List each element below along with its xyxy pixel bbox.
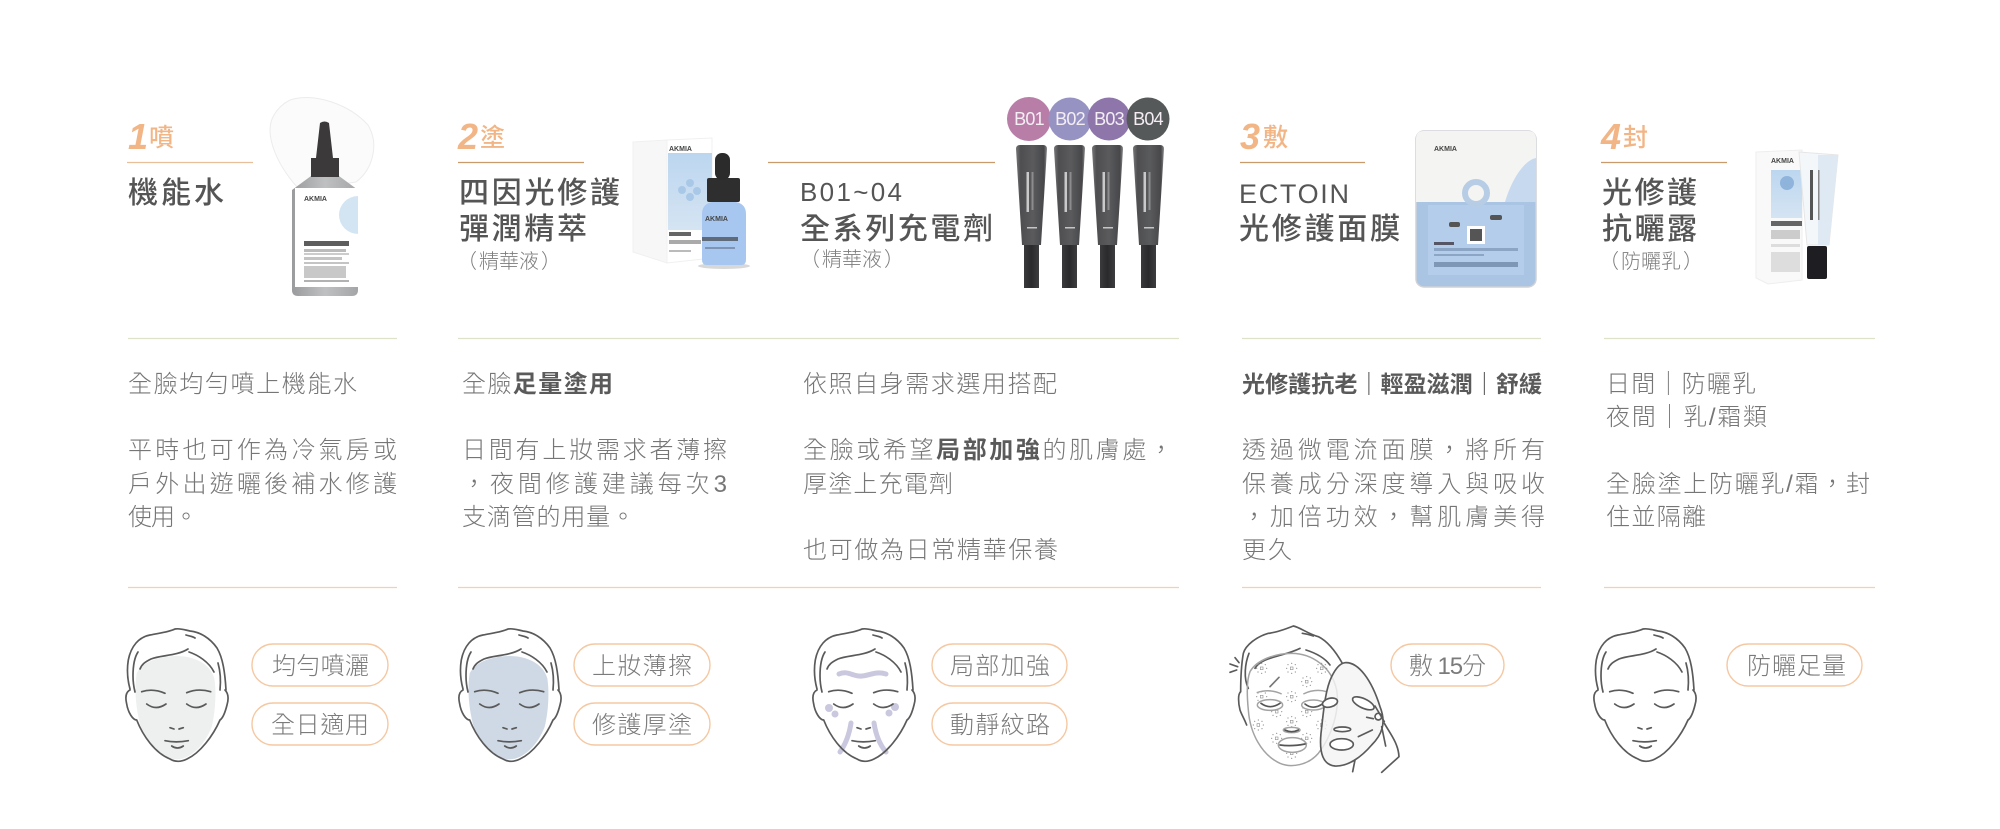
B01~04 heading: 全系列充電劑 (800, 213, 993, 246)
pills: serum (574, 644, 710, 745)
step 4 heading: 光修護 (1602, 177, 1697, 210)
pills: booster: 局部加強 (950, 653, 1050, 680)
icon: plain face (1594, 629, 1696, 761)
step 4 heading (1599, 116, 1727, 273)
B01~04 heading: （精華液） (800, 248, 904, 271)
product: serum box and bottle (633, 138, 750, 269)
text block: step 2 booster (803, 371, 1173, 564)
step 4 heading: 4 (1600, 116, 1621, 157)
text block: step 2 booster: 依照自身需求選用搭配 (803, 371, 1057, 398)
dividers (128, 338, 1875, 588)
colour badges B01-B04: B01 (1014, 109, 1045, 129)
colour badges B01-B04: B04 (1133, 109, 1164, 129)
text block: step 3 (1242, 371, 1545, 564)
step 3 heading: 敷 (1263, 124, 1288, 152)
step 2 heading: 四因光修護 (459, 177, 620, 210)
step 3 heading: 光修護面膜 (1239, 213, 1400, 246)
step 4 heading: 抗曬露 (1602, 213, 1697, 246)
text block: step 2 serum: 全臉足量塗用 (462, 370, 613, 398)
text block: step 2 booster: 也可做為日常精華保養 (803, 537, 1058, 564)
step 2 heading: 2 (457, 116, 478, 157)
icon: face with blue full coverage (459, 629, 561, 761)
pills: spray: 均勻噴灑 (272, 653, 369, 680)
text block: step 2 serum (462, 370, 727, 531)
colour badges B01-B04: B03 (1094, 109, 1125, 129)
text block: step 2 serum: ，夜間修護建議每次3 (462, 471, 727, 498)
step 2 heading: 彈潤精萃 (459, 213, 587, 246)
step 1 heading: 噴 (149, 124, 174, 152)
pill: sunscreen: 防曬足量 (1747, 653, 1846, 680)
text block: step 3: 光修護抗老｜輕盈滋潤｜舒緩 (1242, 371, 1542, 397)
product: spray bottle: AKMIA (304, 196, 327, 203)
product: serum box and bottle: AKMIA (669, 146, 692, 153)
text block: step 3: 保養成分深度導入與吸收 (1242, 471, 1545, 498)
product: mask sachet (1416, 131, 1536, 287)
text block: step 4: 日間｜防曬乳 (1606, 371, 1756, 398)
product: mask sachet: AKMIA (1434, 146, 1457, 153)
pills: booster (932, 644, 1067, 745)
text block: step 1: 戶外出遊曬後補水修護 (128, 471, 397, 498)
product: four booster tubes (1016, 145, 1164, 288)
step 4 heading: 封 (1623, 124, 1648, 152)
pill: mask time (1391, 644, 1504, 686)
text block: step 1: 使用。 (128, 504, 198, 531)
step 3 heading: ECTOIN (1239, 179, 1349, 209)
text block: step 2 booster: 全臉或希望局部加強的肌膚處， (803, 437, 1173, 464)
pill: sunscreen (1727, 644, 1862, 686)
product: spray bottle (270, 98, 374, 296)
text block: step 3: 透過微電流面膜，將所有 (1242, 437, 1545, 464)
step 2 heading: 塗 (480, 124, 505, 152)
step 2 heading: （精華液） (457, 250, 561, 273)
product: serum box and bottle: AKMIA (705, 216, 728, 223)
pills: serum: 修護厚塗 (592, 712, 692, 739)
text block: step 3: 更久 (1242, 537, 1292, 564)
pills: spray (252, 644, 388, 745)
pill: mask time: 敷 15分 (1409, 653, 1486, 680)
text block: step 1 (128, 371, 397, 531)
text block: step 1: 平時也可作為冷氣房或 (128, 437, 397, 464)
step 1 heading (127, 116, 253, 210)
icon: face with wrinkle zones (813, 629, 915, 761)
step 1 heading: 1 (128, 116, 148, 157)
icon: face applying sheet mask (1230, 626, 1399, 772)
product: sunscreen box and tube (1756, 150, 1838, 284)
text block: step 3: ，加倍功效，幫肌膚美得 (1242, 504, 1545, 531)
B01~04 heading (768, 162, 995, 271)
icon: face with grey full coverage (126, 629, 228, 761)
text block: step 4 (1606, 371, 1870, 531)
step 4 heading: （防曬乳） (1599, 250, 1703, 273)
colour badges B01-B04 (1007, 97, 1170, 141)
step 3 heading (1239, 116, 1400, 246)
colour badges B01-B04: B02 (1055, 109, 1086, 129)
text block: step 4: 全臉塗上防曬乳/霜，封 (1606, 471, 1870, 498)
B01~04 heading: B01~04 (800, 177, 902, 207)
pills: booster: 動靜紋路 (950, 712, 1050, 739)
text block: step 2 booster: 厚塗上充電劑 (803, 471, 953, 498)
text block: step 4: 住並隔離 (1606, 504, 1706, 531)
text block: step 1: 全臉均勻噴上機能水 (128, 371, 357, 398)
step 2 heading (457, 116, 620, 273)
product: sunscreen box and tube: AKMIA (1771, 158, 1794, 165)
text block: step 2 serum: 日間有上妝需求者薄擦 (462, 437, 727, 464)
step 1 heading: 機能水 (128, 177, 224, 210)
step 3 heading: 3 (1240, 116, 1260, 157)
pills: spray: 全日適用 (271, 712, 369, 739)
pills: serum: 上妝薄擦 (592, 653, 692, 680)
text block: step 2 serum: 支滴管的用量。 (462, 504, 635, 531)
text block: step 4: 夜間｜乳/霜類 (1606, 404, 1767, 431)
